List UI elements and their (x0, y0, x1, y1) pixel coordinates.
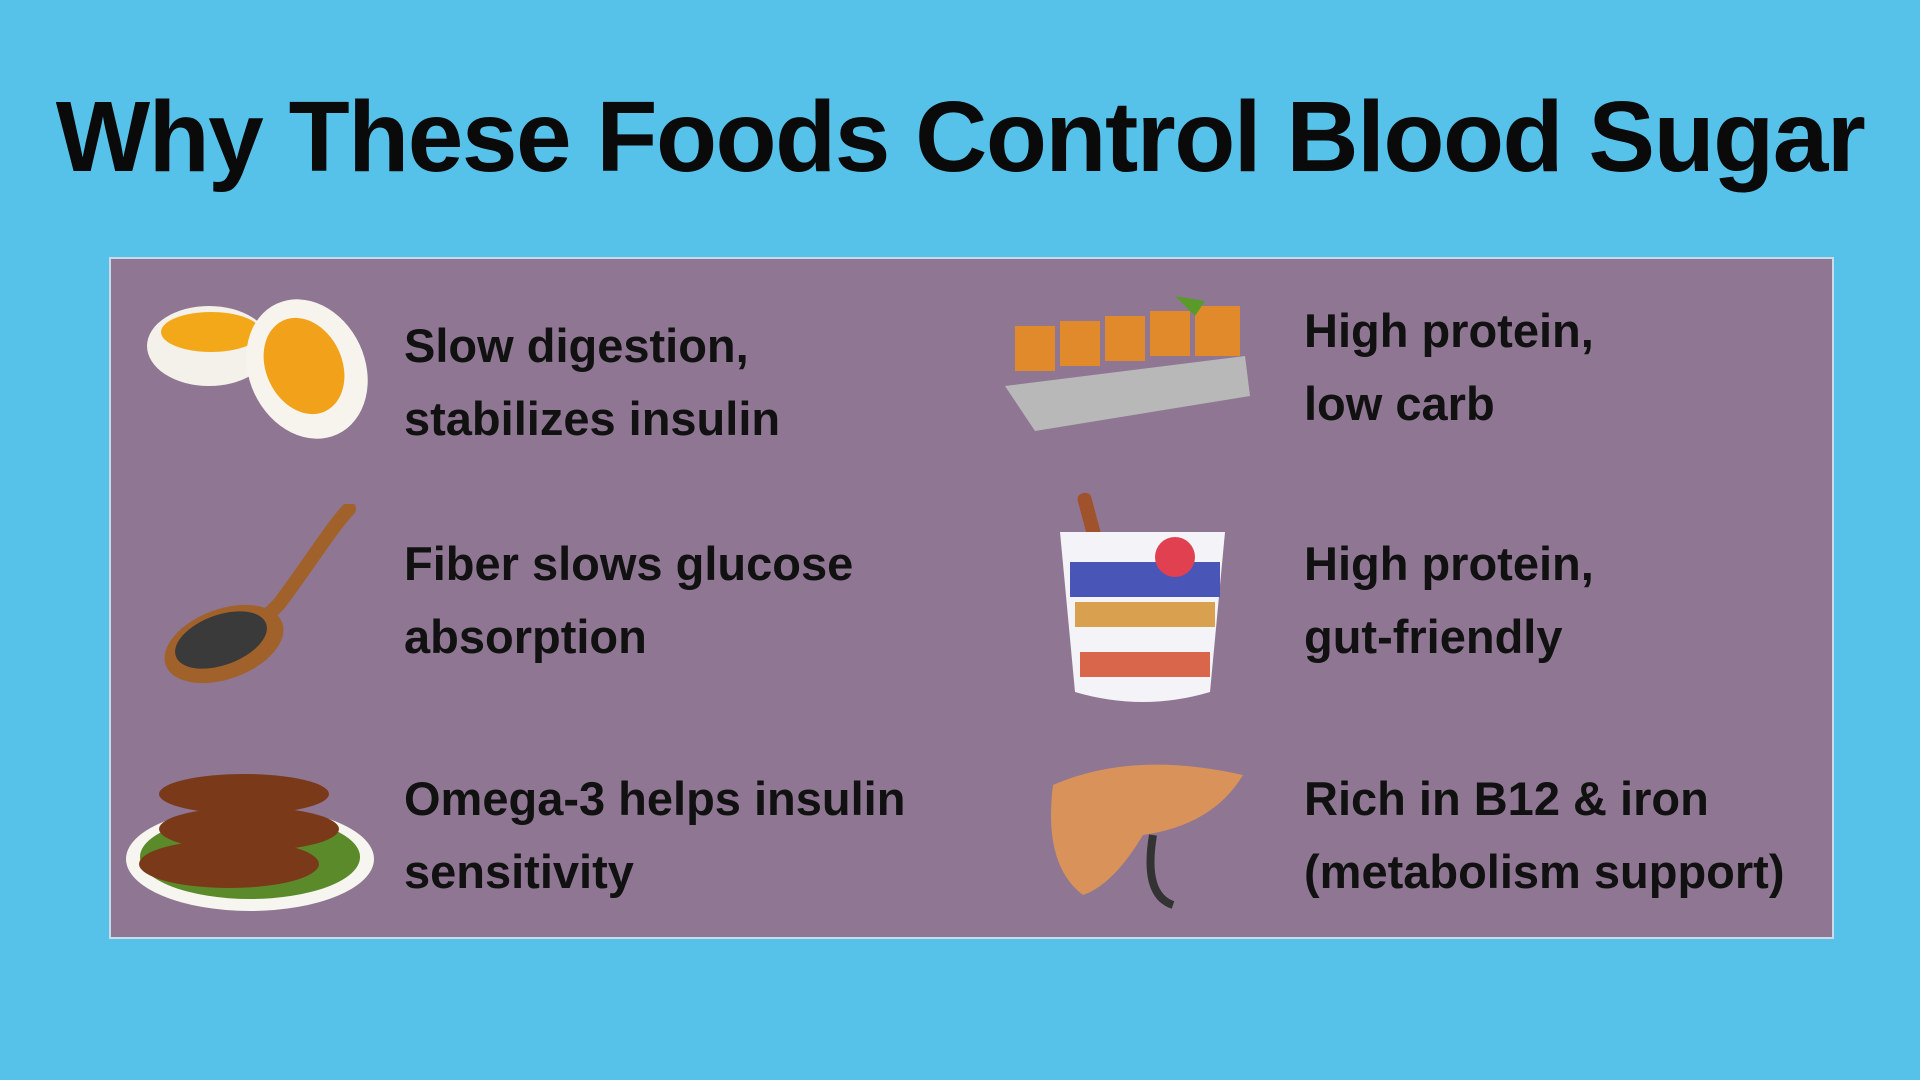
panel: foods (109, 257, 1834, 939)
icon: fish (126, 774, 374, 911)
text: fish: Omega-3 helps insulin (404, 772, 905, 825)
text: yogurt (1304, 537, 1594, 663)
text: paneer (1304, 304, 1594, 430)
icon: eggs (147, 299, 368, 439)
icon: liver (1051, 764, 1243, 909)
text: yogurt: gut-friendly (1304, 610, 1562, 663)
text: eggs: Slow digestion, (404, 319, 749, 372)
text: paneer: High protein, (1304, 304, 1594, 357)
text: liver: (metabolism support) (1304, 845, 1784, 898)
text: eggs (404, 319, 780, 445)
text: eggs: stabilizes insulin (404, 392, 780, 445)
text: chia (404, 537, 853, 663)
text: chia: absorption (404, 610, 647, 663)
icon: chia spoon (164, 504, 356, 684)
text: yogurt: High protein, (1304, 537, 1594, 590)
text: chia: Fiber slows glucose (404, 537, 853, 590)
icon: paneer skewers (1005, 296, 1250, 431)
text: fish: sensitivity (404, 845, 634, 898)
text: fish (404, 772, 905, 898)
text: paneer: low carb (1304, 377, 1495, 430)
title: Why These Foods Control Blood Sugar (56, 81, 1864, 193)
icon: yogurt parfait (1060, 492, 1225, 702)
text: liver (1304, 772, 1784, 898)
text: liver: Rich in B12 & iron (1304, 772, 1709, 825)
